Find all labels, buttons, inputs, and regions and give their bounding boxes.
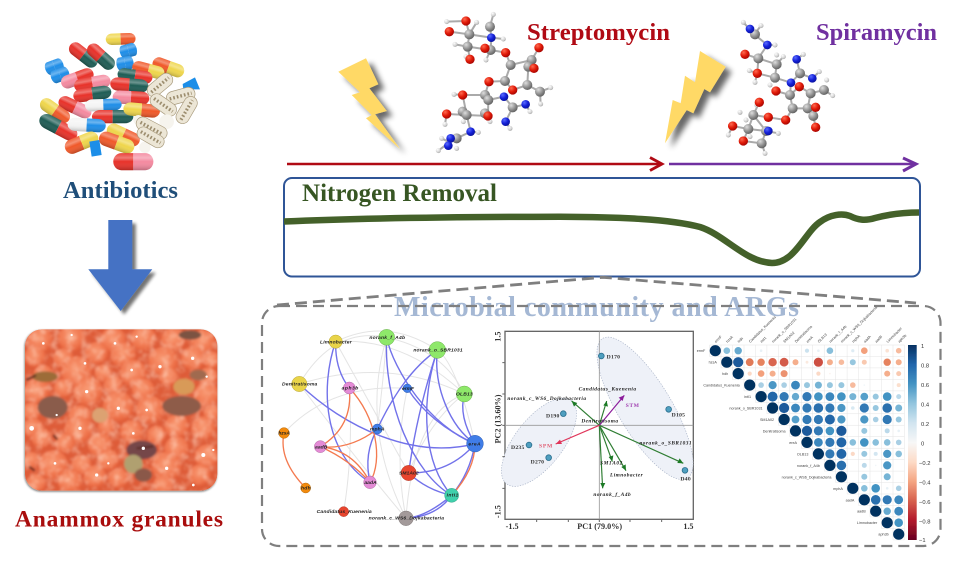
- molecule: streptomycin: [436, 12, 553, 153]
- arrow: spiramycin timeline: [669, 158, 916, 171]
- heatmap column labels: intI1: [760, 336, 767, 344]
- heatmap row labels: [697, 349, 889, 537]
- heatmap column labels: [714, 305, 907, 344]
- PCA biplot: D105: [672, 413, 685, 419]
- PCA biplot: norank_f_A4b: [593, 492, 631, 498]
- heading: Nitrogen Removal: Nitrogen Removal: [302, 180, 497, 207]
- network diagram: aadB: [315, 444, 328, 450]
- heatmap row labels: aadA: [846, 498, 855, 502]
- heatmap row labels: norank_o_SBR1031: [729, 406, 763, 410]
- network diagram: norank_o_SBR1031: [413, 348, 463, 354]
- icon: lightning bolt left: [338, 58, 400, 149]
- PCA biplot: Limnobacter: [609, 473, 644, 479]
- heatmap row labels: Limnobacter: [857, 521, 878, 525]
- heatmap row labels: SM1A02: [760, 418, 774, 422]
- heatmap colour scale: −0.4: [919, 480, 931, 486]
- heatmap colour scale: −1: [919, 538, 926, 544]
- heatmap row labels: mphA: [833, 487, 843, 491]
- PCA biplot: 1.5: [683, 522, 694, 531]
- heatmap column labels: aadA: [863, 334, 872, 344]
- heatmap column labels: OLB13: [817, 333, 828, 344]
- network diagram: Limnobacter: [320, 339, 353, 345]
- network diagram: hdh: [301, 486, 311, 492]
- heading: Microbial community and ARGs: Microbial community and ARGs: [394, 292, 799, 323]
- heatmap column labels: hdh: [737, 337, 744, 344]
- PCA biplot: D190: [546, 414, 559, 420]
- PCA biplot: SM1A02: [600, 461, 623, 467]
- heatmap row labels: hzsA: [709, 361, 717, 365]
- PCA biplot: PC1 (79.0%): [577, 522, 622, 531]
- heatmap colour scale: −0.2: [919, 461, 930, 467]
- PCA biplot: D170: [607, 354, 620, 360]
- heatmap row labels: OLB13: [797, 452, 808, 456]
- correlation heatmap: [697, 305, 931, 544]
- heatmap row labels: norank_c_WS6_Dojkabacteria: [782, 475, 832, 479]
- PCA biplot: norank_o_SBR1031: [639, 440, 692, 446]
- image: anammox granules: [22, 325, 220, 495]
- heading: Spiramycin: Spiramycin: [816, 19, 937, 46]
- heading: Antibiotics: Antibiotics: [63, 177, 178, 204]
- network diagram: ermF: [402, 386, 415, 392]
- network diagram: aph3b: [342, 385, 358, 391]
- PCA biplot: D40: [680, 477, 691, 483]
- heatmap row labels: ermF: [697, 349, 706, 353]
- PCA biplot: D270: [531, 459, 544, 465]
- PCA biplot: Denitratisoma: [580, 418, 618, 424]
- network diagram: OLB13: [456, 392, 473, 398]
- network diagram: norank_f_A4b: [369, 335, 405, 341]
- arrow: antibiotics to granules: [88, 220, 152, 311]
- heatmap colour scale: 0: [921, 442, 924, 448]
- line chart: nitrogen removal trend: [284, 212, 919, 263]
- heatmap row labels: intI1: [744, 395, 751, 399]
- heatmap row labels: Denitratisoma: [763, 429, 786, 433]
- panel: nitrogen removal: [284, 178, 920, 276]
- heatmap column labels: hzsA: [725, 335, 734, 344]
- PCA biplot: 1.5: [493, 332, 502, 342]
- icon: lightning bolt right: [665, 51, 726, 143]
- network diagram: SM1A02: [399, 471, 419, 477]
- heatmap column labels: Candidatus_Kuenenia: [748, 315, 777, 344]
- network diagram: aadA: [364, 480, 377, 486]
- PCA biplot: norank_c_WS6_Dojkabacteria: [507, 396, 586, 402]
- heatmap row labels: Candidatus_Kuenenia: [703, 384, 741, 388]
- heatmap column labels: ereA: [806, 335, 814, 344]
- heatmap column labels: aadB: [874, 334, 884, 344]
- icon: antibiotic pills: [37, 33, 200, 170]
- PCA biplot: STM: [626, 403, 640, 409]
- network diagram: mphA: [370, 427, 385, 433]
- heatmap colour scale: 1: [921, 344, 924, 350]
- heatmap colour scale: 0.2: [921, 422, 929, 428]
- heatmap column labels: norank_o_SBR1031: [771, 317, 797, 344]
- network diagram: Candidatus_Kuenenia: [317, 509, 372, 515]
- heatmap row labels: aadB: [857, 510, 866, 514]
- heatmap column labels: SM1A02: [783, 331, 796, 344]
- PCA biplot: SPM: [539, 443, 553, 449]
- heatmap colour scale: [908, 344, 931, 544]
- heatmap row labels: hdh: [722, 372, 728, 376]
- network diagram: intI1: [447, 493, 459, 499]
- heatmap row labels: ereA: [789, 441, 798, 445]
- PCA biplot: D235: [511, 445, 525, 451]
- heading: Streptomycin: Streptomycin: [527, 19, 670, 46]
- PCA biplot: [488, 325, 710, 531]
- PCA biplot: Candidatus_Kuenenia: [579, 387, 636, 393]
- network diagram: norank_c_WS6_Dojkabacteria: [369, 516, 444, 522]
- heatmap column labels: aph3b: [897, 334, 907, 344]
- network diagram: [278, 329, 483, 526]
- heatmap correlation circles: [710, 345, 904, 540]
- heatmap column labels: ermF: [714, 334, 723, 344]
- network diagram: ereA: [468, 441, 481, 447]
- heatmap row labels: norank_f_A4b: [797, 464, 820, 468]
- heatmap colour scale: 0.4: [921, 402, 930, 408]
- panel: microbial community and ARGs: [262, 292, 940, 546]
- molecule: spiramycin: [726, 20, 835, 156]
- heatmap colour scale: −0.8: [919, 520, 930, 526]
- heatmap column labels: norank_c_WS6_Dojkabacteria: [840, 305, 879, 344]
- network diagram: Denitratisoma: [282, 382, 318, 388]
- PCA biplot: PC2 (13.60%): [493, 394, 502, 443]
- heatmap colour scale: −0.6: [919, 500, 930, 506]
- heatmap colour scale: 0.6: [921, 383, 929, 389]
- heatmap column labels: Limnobacter: [886, 326, 904, 344]
- PCA biplot: -1.5: [506, 522, 519, 531]
- heading: Anammox granules: Anammox granules: [15, 506, 223, 532]
- PCA biplot: -1.5: [493, 505, 502, 518]
- heatmap colour scale: 0.8: [921, 364, 929, 370]
- dashed zoom connector: [277, 277, 916, 305]
- network diagram: hzsA: [278, 431, 290, 437]
- heatmap column labels: Denitratisoma: [794, 324, 814, 344]
- heatmap column labels: mphA: [851, 334, 861, 344]
- heatmap row labels: aph3b: [878, 533, 889, 537]
- heatmap column labels: norank_f_A4b: [828, 325, 848, 344]
- arrow: streptomycin timeline: [287, 158, 662, 170]
